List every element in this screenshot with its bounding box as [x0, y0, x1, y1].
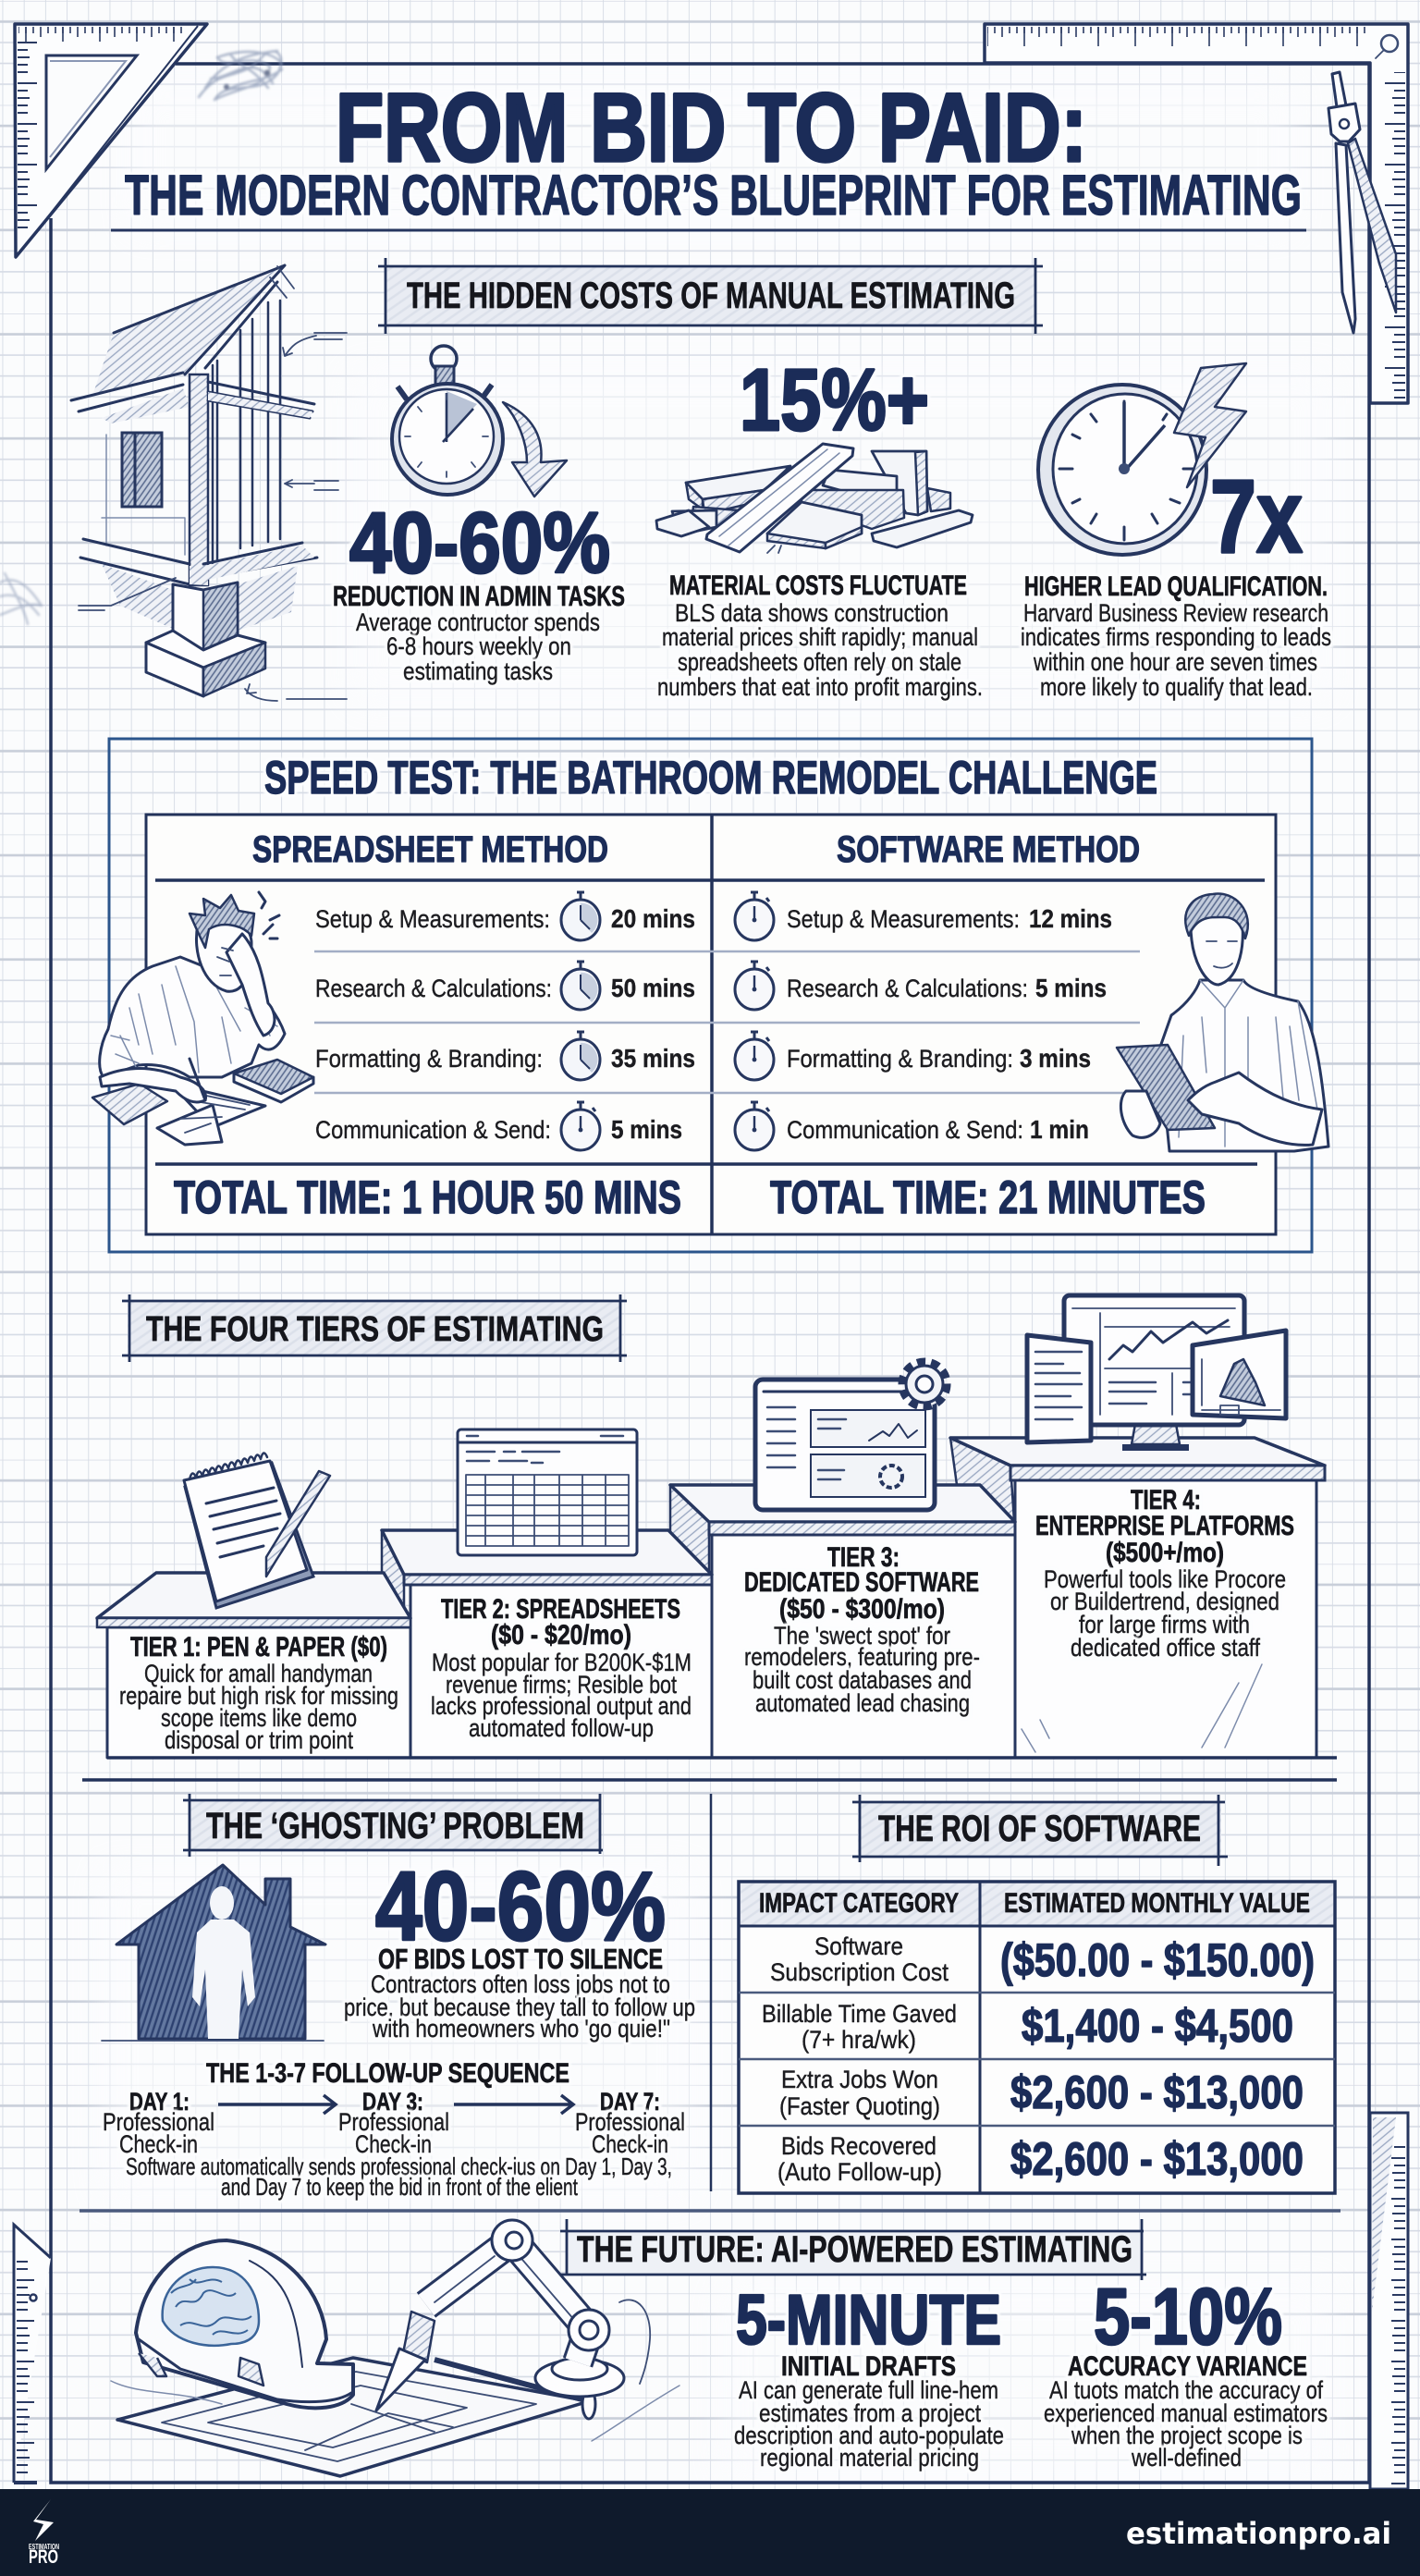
- heading banner: hidden costs: [378, 258, 1043, 334]
- ROI table: [739, 1882, 1335, 2193]
- row: research: [315, 962, 695, 1010]
- icon: enterprise monitor and tablets: [1027, 1295, 1286, 1451]
- row: subscription cost: ($50.00 - $150.00): [1000, 1934, 1315, 1986]
- follow-up sequence heading: THE 1-3-7 FOLLOW-UP SEQUENCE: [206, 2058, 569, 2089]
- stat: initial drafts: AI can generate full line-hem: [739, 2376, 998, 2404]
- column total: TOTAL TIME: 1 HOUR 50 MINS: [174, 1171, 681, 1223]
- tier 3 text: [744, 1542, 980, 1717]
- stat number: 40-60%: [375, 1852, 666, 1961]
- row: bids recovered: (Auto Follow-up): [777, 2158, 942, 2186]
- stat: initial drafts: [734, 2281, 1004, 2472]
- tier 2 text: Most popular for B200K-$1M: [432, 1649, 692, 1676]
- tier 3 text: remodelers, featuring pre-: [744, 1643, 980, 1671]
- row: research: 5 mins: [1035, 974, 1107, 1002]
- row: setup: Setup & Measurements:: [787, 905, 1020, 933]
- step: day 3: DAY 3:: [362, 2088, 423, 2116]
- row: formatting: Formatting & Branding:: [787, 1045, 1013, 1073]
- row: communication: 5 mins: [611, 1115, 682, 1144]
- sequence note: Software automatically sends professional check-ius on Day 1, Day 3,: [126, 2153, 672, 2180]
- tier 1 text: [119, 1632, 398, 1754]
- arrow: day 1 to day 3: [218, 2095, 336, 2114]
- tier 2 block: [382, 1530, 712, 1758]
- row: formatting: 3 mins: [1020, 1044, 1091, 1073]
- stat: accuracy variance: [1044, 2273, 1328, 2472]
- step: day 1: DAY 1:: [129, 2088, 190, 2116]
- step: day 7: Professional: [575, 2108, 685, 2136]
- row: research: Research & Calculations:: [787, 975, 1028, 1002]
- heading banner: four tiers: THE FOUR TIERS OF ESTIMATING: [146, 1310, 604, 1349]
- row: setup: Setup & Measurements:: [315, 905, 550, 933]
- step: day 3: Check-in: [355, 2130, 432, 2158]
- step: day 7: Check-in: [592, 2130, 668, 2158]
- stat body: 6-8 hours weekly on: [386, 632, 571, 660]
- tier 2 text: TIER 2: SPREADSHEETS: [441, 1594, 680, 1625]
- stat label: REDUCTION IN ADMIN TASKS: [333, 580, 625, 612]
- panel: the future: [111, 2219, 1328, 2476]
- column heading: SPREADSHEET METHOD: [252, 829, 608, 870]
- tier 4 text: or Buildertrend, designed: [1050, 1588, 1279, 1615]
- stat body: [657, 599, 983, 701]
- table header: [759, 1888, 1310, 1919]
- tier 3 text: The 'swect spot' for: [774, 1622, 950, 1650]
- row: research: Research & Calculations:: [315, 975, 552, 1002]
- column heading: SOFTWARE METHOD: [837, 829, 1140, 870]
- ruler: bottom left: [14, 2225, 51, 2483]
- row: communication: Communication & Send:: [787, 1116, 1023, 1144]
- sequence note: and Day 7 to keep the bid in front of the elient: [221, 2173, 579, 2201]
- row: setup: [735, 892, 1112, 940]
- stat body: Harvard Business Review research: [1023, 599, 1328, 627]
- robot arm: [376, 2220, 650, 2410]
- table header: IMPACT CATEGORY: [759, 1888, 959, 1919]
- stat: initial drafts: INITIAL DRAFTS: [781, 2351, 956, 2382]
- stat body: numbers that eat into profit margins.: [657, 673, 983, 701]
- tier 4 block: [950, 1438, 1325, 1758]
- tier 4 text: for large firms with: [1079, 1611, 1250, 1638]
- section divider lines: [80, 1780, 1340, 2211]
- row: extra jobs: $2,600 - $13,000: [1010, 2067, 1304, 2118]
- stat body: BLS data shows construction: [675, 599, 949, 627]
- body text: Contractors often loss jobs not to: [371, 1970, 670, 1998]
- tier 2 text: ($0 - $20/mo): [491, 1620, 631, 1650]
- tier 4 text: ($500+/mo): [1106, 1538, 1224, 1568]
- website url: estimationpro.ai: [1126, 2516, 1391, 2551]
- row: bids recovered: $2,600 - $13,000: [1010, 2133, 1304, 2185]
- stat label: MATERIAL COSTS FLUCTUATE: [669, 570, 967, 601]
- icon: drafting compass: [1328, 72, 1396, 333]
- icon: spreadsheet window: [458, 1429, 637, 1555]
- tier 3 text: automated lead chasing: [755, 1689, 970, 1717]
- logo wordmark: ESTIMATION: [29, 2543, 59, 2551]
- row: research: [735, 962, 1107, 1010]
- stat: initial drafts: regional material pricing: [760, 2444, 979, 2472]
- row: communication: Communication & Send:: [315, 1116, 551, 1144]
- panel: ROI of software: [739, 1795, 1335, 2193]
- icon: stopwatch with down arrow: [392, 346, 567, 497]
- arrow: day 3 to day 7: [454, 2095, 573, 2114]
- step: day 3: Professional: [338, 2108, 449, 2136]
- tier 4 text: TIER 4:: [1131, 1485, 1201, 1515]
- illustration: house framing sketch: [71, 265, 347, 701]
- stat: accuracy variance: 5-10%: [1094, 2273, 1282, 2361]
- row: extra jobs: Extra Jobs Won: [781, 2066, 938, 2093]
- heading banner: hidden costs: THE HIDDEN COSTS OF MANUAL ESTIMATING: [407, 276, 1015, 316]
- stat body: material prices shift rapidly; manual: [662, 623, 978, 651]
- step: day 1: Check-in: [119, 2130, 198, 2158]
- tier 1 text: Quick for amall handyman: [144, 1660, 373, 1687]
- row: setup: 20 mins: [611, 904, 695, 933]
- heading banner: [560, 2219, 1146, 2280]
- stat body: more likely to qualify that lead.: [1040, 673, 1313, 701]
- row: formatting: [735, 1032, 1091, 1080]
- logo: PRO: [29, 2546, 58, 2568]
- heading banner: four tiers: [122, 1294, 627, 1362]
- hard hat with brain: [111, 2240, 353, 2408]
- tier 1 text: scope items like demo: [161, 1704, 357, 1732]
- column total: TOTAL TIME: 21 MINUTES: [770, 1171, 1206, 1223]
- row: subscription cost: Software: [814, 1932, 903, 1960]
- stat body: [1021, 599, 1331, 701]
- step: day 3: [338, 2088, 449, 2158]
- row: setup: [315, 892, 695, 940]
- row: subscription cost: Subscription Cost: [770, 1958, 949, 1986]
- stat: accuracy variance: AI tuots match the accuracy of: [1049, 2376, 1323, 2404]
- panel: speed test: [92, 739, 1328, 1252]
- icon: notepad and pencil: [184, 1453, 330, 1608]
- stat body: within one hour are seven times: [1033, 648, 1317, 676]
- icon: dedicated software screen and gear: [755, 1362, 947, 1510]
- tier 3 text: ($50 - $300/mo): [779, 1594, 945, 1625]
- heading banner: THE FUTURE: AI-POWERED ESTIMATING: [577, 2229, 1132, 2270]
- stat label: OF BIDS LOST TO SILENCE: [378, 1943, 663, 1975]
- stat: lead qualification: [1021, 363, 1331, 701]
- tier 3 block: [670, 1485, 1015, 1758]
- row: communication: [735, 1102, 1089, 1150]
- row: formatting: 35 mins: [611, 1044, 695, 1073]
- ground line: [107, 1756, 1337, 1760]
- logo: [29, 2499, 59, 2568]
- column: software method: [735, 829, 1206, 1223]
- title: [111, 74, 1306, 230]
- body text: with homeowners who 'go quie!": [372, 2015, 670, 2042]
- title rule: [111, 229, 1306, 231]
- tier 1 block: [97, 1573, 410, 1758]
- stat number: 40-60%: [349, 495, 610, 591]
- footer bar: [0, 2489, 1420, 2576]
- icon: set square, top left: [15, 24, 207, 257]
- tier 3 text: DEDICATED SOFTWARE: [744, 1567, 979, 1598]
- pencil scribble smudge, left: [0, 573, 42, 624]
- stat number: 15%+: [740, 351, 929, 449]
- stat: initial drafts: 5-MINUTE: [736, 2281, 1001, 2360]
- row: extra jobs: [779, 2066, 1304, 2120]
- icon: framing square ruler, top right: [985, 24, 1408, 403]
- row: bids recovered: [777, 2132, 1304, 2186]
- stat: initial drafts: description and auto-populate: [734, 2422, 1004, 2449]
- stat body: Average contructor spends: [356, 608, 600, 636]
- stat: material costs: [656, 351, 983, 701]
- stat number: 7x: [1210, 459, 1303, 574]
- row: setup: 12 mins: [1029, 904, 1112, 933]
- row: bids recovered: Bids Recovered: [781, 2132, 936, 2160]
- stat body: [356, 608, 600, 685]
- stat: initial drafts: estimates from a project: [759, 2399, 981, 2427]
- tier 4 text: Powerful tools like Procore: [1044, 1565, 1286, 1593]
- title line 1: FROM BID TO PAID:: [336, 74, 1087, 182]
- tier 3 text: built cost databases and: [753, 1666, 972, 1694]
- step: day 1: Professional: [103, 2108, 214, 2136]
- tier 2 text: lacks professional output and: [431, 1692, 692, 1720]
- heading banner: THE ROI OF SOFTWARE: [878, 1809, 1201, 1849]
- row: subscription cost: [770, 1932, 1315, 1986]
- comparison table: [146, 815, 1276, 1234]
- heading banner: [852, 1795, 1228, 1866]
- panel: ghosting problem: [102, 1794, 695, 2201]
- row: communication: [315, 1102, 682, 1150]
- tier 4 text: [1035, 1485, 1294, 1662]
- row: billable time: Billable Time Gaved: [762, 2000, 957, 2028]
- row: extra jobs: (Faster Quoting): [779, 2092, 940, 2120]
- step: day 7: DAY 7:: [600, 2088, 660, 2116]
- body text: [344, 1970, 695, 2042]
- icon: clock with lightning: [1038, 363, 1246, 555]
- row: communication: 1 min: [1030, 1115, 1089, 1144]
- tier 4 text: ENTERPRISE PLATFORMS: [1035, 1511, 1294, 1541]
- staircase: four tiers: [97, 1295, 1337, 1758]
- table header: ESTIMATED MONTHLY VALUE: [1004, 1888, 1310, 1919]
- step: day 7: [575, 2088, 685, 2158]
- tier 3 text: TIER 3:: [827, 1542, 900, 1573]
- illustration: helmet, robot arm and blueprint: [111, 2220, 679, 2476]
- tier 2 text: revenue firms; Resible bot: [446, 1671, 677, 1699]
- body text: price, but because they tall to follow up: [344, 1993, 695, 2021]
- row: formatting: Formatting & Branding:: [315, 1045, 543, 1073]
- tier 2 text: [431, 1594, 692, 1742]
- ruler: bottom right: [1370, 2113, 1408, 2489]
- heading banner: [183, 1794, 603, 1857]
- pencil scribble smudge, top: [199, 51, 282, 100]
- row: billable time: [762, 2000, 1293, 2054]
- row: billable time: (7+ hra/wk): [802, 2026, 916, 2054]
- tier 1 text: disposal or trim point: [165, 1726, 353, 1754]
- stat body: spreadsheets often rely on stale: [678, 648, 961, 676]
- panel frame: [109, 739, 1312, 1252]
- illustration: stressed man with paperwork: [92, 892, 313, 1145]
- illustration: calm man with tablet: [1117, 894, 1328, 1151]
- stat body: estimating tasks: [403, 657, 553, 685]
- row: research: 50 mins: [611, 974, 695, 1002]
- stat: accuracy variance: ACCURACY VARIANCE: [1068, 2351, 1307, 2382]
- stat: admin tasks: [333, 346, 625, 685]
- tier 1 text: repaire but high risk for missing: [119, 1682, 398, 1710]
- column: spreadsheet method: [174, 829, 695, 1223]
- tier 1 text: TIER 1: PEN & PAPER ($0): [130, 1632, 387, 1662]
- stat: accuracy variance: when the project scope is: [1071, 2422, 1303, 2449]
- sequence note: [126, 2153, 672, 2201]
- stat: accuracy variance: well-defined: [1131, 2444, 1242, 2472]
- icon: lumber pile: [656, 444, 973, 553]
- tier 2 text: automated follow-up: [469, 1714, 654, 1742]
- stat: accuracy variance: experienced manual estimators: [1044, 2399, 1328, 2427]
- blueprint sheet: [117, 2358, 679, 2476]
- icon: logo bolt: [33, 2499, 54, 2541]
- heading banner: THE ‘GHOSTING’ PROBLEM: [206, 1806, 584, 1846]
- row: formatting: [315, 1032, 695, 1080]
- row: billable time: $1,400 - $4,500: [1022, 2000, 1293, 2052]
- tier 4 text: dedicated office staff: [1071, 1634, 1260, 1662]
- icon: ghosted house: [102, 1865, 325, 2041]
- step: day 1: [103, 2088, 214, 2158]
- stat body: indicates firms responding to leads: [1021, 623, 1331, 651]
